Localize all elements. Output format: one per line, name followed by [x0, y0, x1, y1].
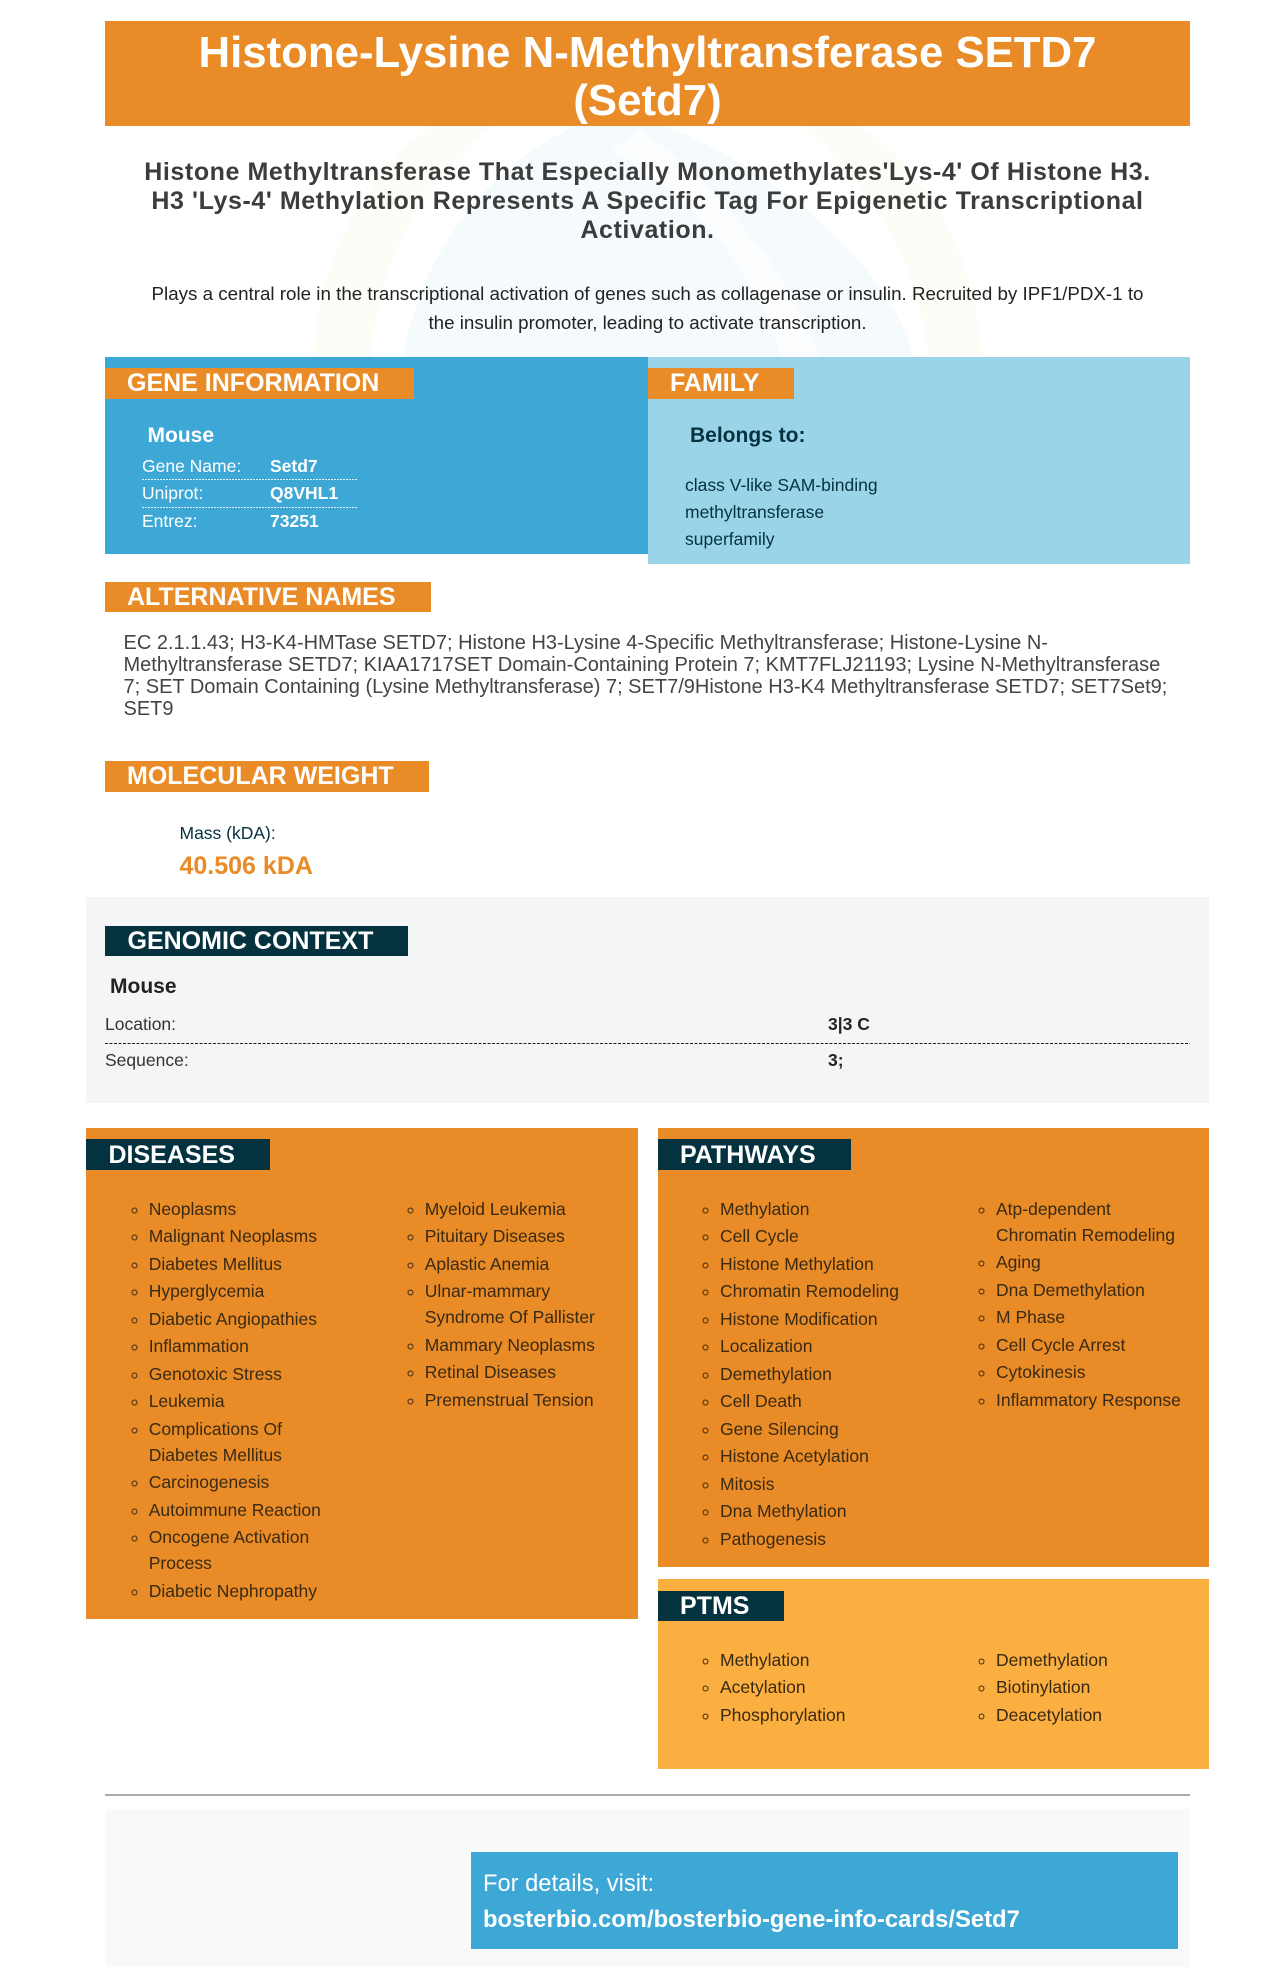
ptms list column 1: Phosphorylation [720, 1705, 846, 1725]
diseases list column 1: Diabetic Angiopathies [149, 1309, 317, 1329]
diseases list column 2: Pituitary Diseases [425, 1226, 565, 1246]
pathways list column 1: Histone Acetylation [720, 1446, 869, 1466]
heading: diseases [86, 1139, 270, 1170]
alternative names text: EC 2.1.1.43; H3-K4-HMTase SETD7; Histone H3-Lysine 4-Specific Methyltransferase; Histone-Lysine N- [124, 632, 1048, 654]
title banner [105, 21, 1190, 126]
panel: footer [105, 1809, 1190, 1967]
subtitle: H3 'Lys-4' Methylation Represents A Specific Tag For Epigenetic Transcriptional [151, 186, 1144, 214]
family description: superfamily [685, 529, 774, 549]
heading: ptms [658, 1591, 784, 1621]
uniprot row [142, 483, 357, 508]
pathways list column 1: Demethylation [720, 1364, 832, 1384]
pathways list column 1: Chromatin Remodeling [720, 1281, 899, 1301]
diseases list column 2: Myeloid Leukemia [425, 1199, 566, 1219]
alternative names text [124, 632, 1167, 720]
entrez row: Entrez: [142, 511, 197, 531]
family description [685, 475, 878, 549]
molecular weight value: 40.506 kDA [180, 852, 313, 880]
diseases list column 2: Premenstrual Tension [425, 1390, 594, 1410]
species label: Mouse [148, 424, 214, 447]
diseases list column 1: Oncogene Activation [149, 1527, 309, 1547]
sequence row: 3; [828, 1050, 844, 1070]
diseases list column 1: Diabetes Mellitus [149, 1254, 282, 1274]
ptms list column 1 [702, 1650, 846, 1725]
ptms list column 1: Acetylation [720, 1677, 806, 1697]
panel: pathways [658, 1128, 1209, 1567]
description: Plays a central role in the transcriptional activation of genes such as collagenase or insulin. Recruited by IPF1/PDX-1 to [152, 282, 1143, 304]
panel: diseases [86, 1128, 638, 1619]
heading: molecular weight: MOLECULAR WEIGHT [127, 762, 394, 790]
heading: gene information: GENE INFORMATION [127, 369, 379, 397]
ptms list column 2 [978, 1650, 1108, 1725]
ptms list column 2: Biotinylation [996, 1677, 1090, 1697]
ptms list column 2: Deacetylation [996, 1705, 1102, 1725]
pathways list column 2: Cytokinesis [996, 1362, 1085, 1382]
species label: Mouse [110, 975, 177, 998]
diseases list column 1: Leukemia [149, 1391, 225, 1411]
callout label: For details, visit: [483, 1871, 654, 1897]
pathways list column 2: Atp-dependent [996, 1199, 1111, 1219]
diseases list column 2: Syndrome Of Pallister [425, 1307, 595, 1327]
panel: gene information [105, 357, 648, 554]
diseases list column 2: Aplastic Anemia [425, 1254, 549, 1274]
description [152, 282, 1143, 333]
pathways list column 2: Inflammatory Response [996, 1390, 1181, 1410]
alternative names text: SET9 [124, 698, 174, 720]
belongs to label: Belongs to: [690, 424, 806, 447]
molecular weight value [180, 823, 313, 880]
pathways list column 2: Aging [996, 1252, 1041, 1272]
panel: ptms [658, 1579, 1209, 1769]
heading: pathways [658, 1139, 851, 1170]
location row [105, 1014, 1190, 1044]
alternative names text: 7; SET Domain Containing (Lysine Methyltransferase) 7; SET7/9Histone H3-K4 Methyltransferase SETD7; SET7Set9; [124, 676, 1167, 698]
ptms list column 1: Methylation [720, 1650, 810, 1670]
diseases list column 1: Malignant Neoplasms [149, 1226, 317, 1246]
diseases list column 1: Genotoxic Stress [149, 1364, 282, 1384]
diseases list column 1: Hyperglycemia [149, 1281, 264, 1301]
diseases list column 2: Retinal Diseases [425, 1362, 556, 1382]
gene name row: Gene Name: [142, 456, 241, 476]
heading: family [648, 368, 794, 399]
subtitle: Activation. [580, 216, 715, 244]
pathways list column 2: Chromatin Remodeling [996, 1225, 1175, 1245]
diseases list column 1: Process [149, 1553, 212, 1573]
panel: family [648, 357, 1190, 564]
pathways list column 2: M Phase [996, 1307, 1065, 1327]
panel: genomic context [86, 897, 1209, 1103]
heading: ptms: PTMS [680, 1592, 749, 1620]
diseases list column 1: Carcinogenesis [149, 1472, 269, 1492]
molecular weight value: Mass (kDA): [180, 823, 276, 843]
location row: 3|3 C [828, 1014, 870, 1034]
ptms list column 2: Demethylation [996, 1650, 1108, 1670]
heading: pathways: PATHWAYS [680, 1141, 816, 1169]
pathways list column 1: Mitosis [720, 1474, 774, 1494]
entrez row [142, 511, 319, 531]
pathways list column 2 [978, 1199, 1181, 1410]
location row: Location: [105, 1014, 176, 1034]
diseases list column 2: Mammary Neoplasms [425, 1335, 595, 1355]
pathways list column 1: Localization [720, 1336, 812, 1356]
pathways list column 2: Dna Demethylation [996, 1280, 1145, 1300]
sequence row [105, 1050, 844, 1070]
pathways list column 2: Cell Cycle Arrest [996, 1335, 1125, 1355]
alternative names text: Methyltransferase SETD7; KIAA1717SET Domain-Containing Protein 7; KMT7FLJ21193; Lysine N-Methyltransferase [124, 654, 1160, 676]
pathways list column 1: Methylation [720, 1199, 810, 1219]
diseases list column 2 [408, 1199, 595, 1410]
diseases list column 1 [132, 1199, 321, 1601]
uniprot row: Uniprot: [142, 483, 203, 503]
pathways list column 1 [702, 1199, 899, 1549]
diseases list column 1: Neoplasms [149, 1199, 236, 1219]
pathways list column 1: Gene Silencing [720, 1419, 839, 1439]
heading: family: FAMILY [670, 369, 759, 397]
description: the insulin promoter, leading to activate transcription. [428, 312, 867, 332]
uniprot row: Q8VHL1 [270, 483, 338, 503]
pathways list column 1: Cell Death [720, 1391, 802, 1411]
subtitle: Histone Methyltransferase That Especially Monomethylates'Lys-4' Of Histone H3. [144, 158, 1151, 186]
diseases list column 1: Inflammation [149, 1336, 249, 1356]
heading: genomic context: GENOMIC CONTEXT [128, 927, 373, 955]
diseases list column 2: Ulnar-mammary [425, 1281, 550, 1301]
pathways list column 1: Pathogenesis [720, 1529, 826, 1549]
heading: alternative names: ALTERNATIVE NAMES [127, 583, 396, 611]
pathways list column 1: Cell Cycle [720, 1226, 799, 1246]
title banner: (Setd7) [573, 76, 722, 124]
callout: details link [471, 1852, 1178, 1949]
subtitle [144, 158, 1151, 244]
pathways list column 1: Histone Methylation [720, 1254, 874, 1274]
title banner: Histone-Lysine N-Methyltransferase SETD7 [199, 28, 1096, 77]
heading: diseases: DISEASES [108, 1141, 235, 1169]
sequence row: Sequence: [105, 1050, 189, 1070]
entrez row: 73251 [270, 511, 319, 531]
gene name row [142, 456, 357, 480]
diseases list column 1: Diabetes Mellitus [149, 1445, 282, 1465]
family description: class V-like SAM-binding [685, 475, 878, 495]
background watermark logo [313, 126, 983, 357]
diseases list column 1: Autoimmune Reaction [149, 1500, 321, 1520]
pathways list column 1: Dna Methylation [720, 1501, 846, 1521]
diseases list column 1: Complications Of [149, 1419, 282, 1439]
pathways list column 1: Histone Modification [720, 1309, 878, 1329]
family description: methyltransferase [685, 502, 824, 522]
diseases list column 1: Diabetic Nephropathy [149, 1581, 317, 1601]
callout url: bosterbio.com/bosterbio-gene-info-cards/Setd7 [483, 1906, 1020, 1933]
gene name row: Setd7 [270, 456, 318, 476]
